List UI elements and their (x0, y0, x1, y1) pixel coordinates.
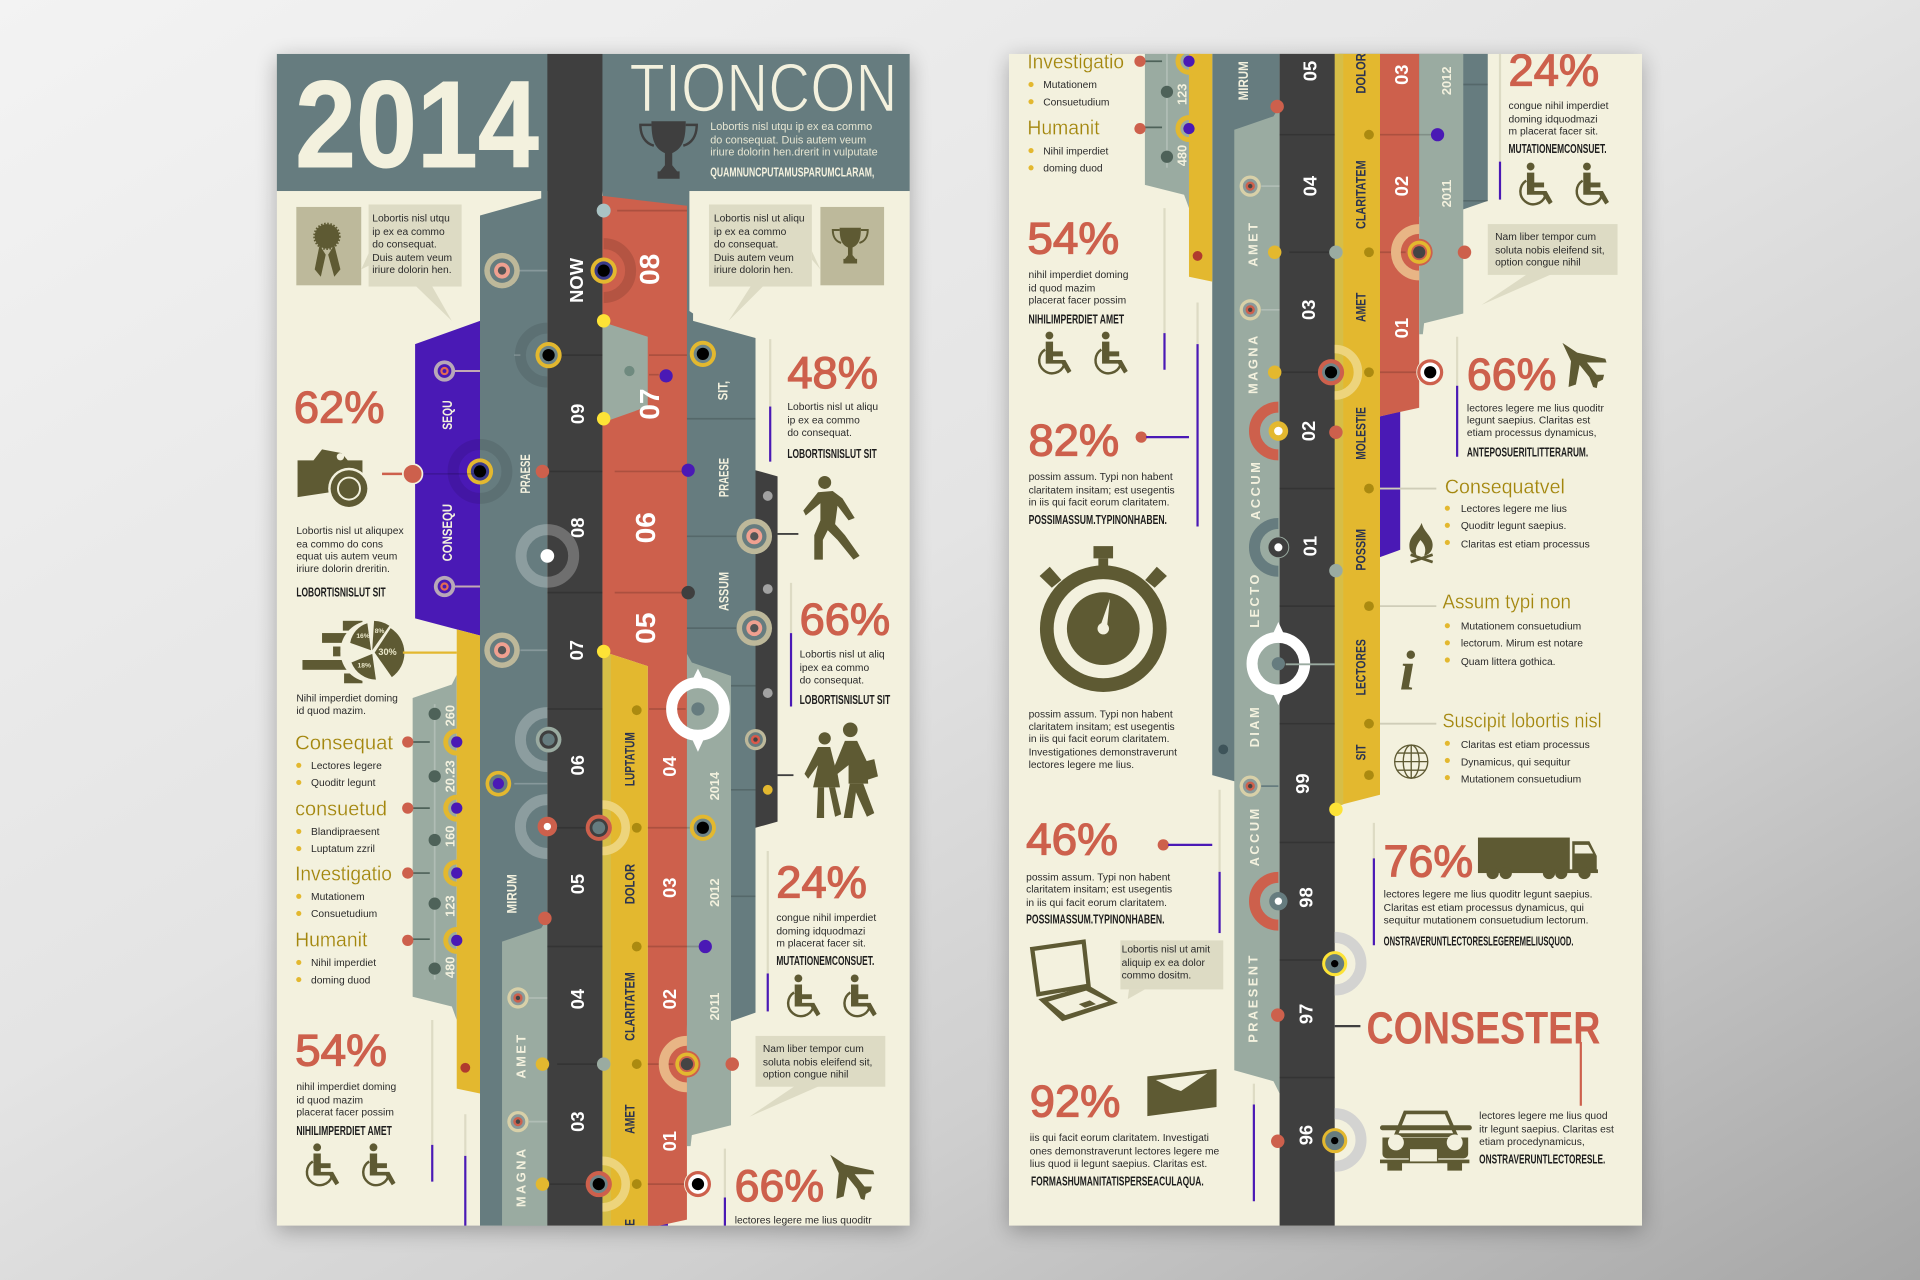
stat 62% with camera (294, 383, 480, 599)
stat 48%: 48% (787, 349, 878, 398)
stat 92% with envelope: iis qui facit eorum claritatem. Investigati (1030, 1133, 1209, 1144)
timeline markers upper (434, 204, 773, 1207)
strip labels: 01 (659, 1131, 680, 1151)
stat 54% repeated: placerat facer possim (1029, 296, 1126, 307)
stat 76% with truck: ONSTRAVERUNTLECTORESLEGEREMELIUSQUOD. (1384, 933, 1573, 948)
list: Suscipit lobortis nisl with globe: Dynamicus, qui sequitur (1461, 757, 1571, 768)
callout: ribbon (296, 204, 462, 321)
strip labels: AMET (513, 1032, 528, 1079)
lists: left column: Blandipraesent (311, 827, 380, 838)
stat 24% with wheelchairs (768, 851, 877, 1016)
strip labels: right page: 97 (1296, 1004, 1317, 1024)
panel: right page (1009, 45, 1642, 1226)
list: Assum typi non with info icon: Mutationem consuetudium (1461, 621, 1581, 632)
stat 92% with envelope: ones demonstraverunt lectores legere me (1030, 1147, 1220, 1158)
strip labels: 260 (442, 705, 457, 726)
strip labels: 2014 (707, 771, 722, 800)
stat 62% with camera: 62% (294, 383, 384, 432)
strip labels: right page: 99 (1292, 773, 1313, 794)
stat 76% with truck: sequitur mutationem consuetudium lectorum. (1384, 915, 1589, 926)
callout: ribbon: do consequat. (372, 239, 437, 250)
lists: left column: Humanit (295, 930, 368, 952)
strip labels: right page: 2012 (1439, 67, 1454, 95)
stat 66% lower with plane: lectores legere me lius quoditr (735, 1215, 872, 1226)
strip labels: 06 (567, 755, 588, 776)
stat 48%: Lobortis nisl ut aliqu (787, 402, 878, 413)
stat 82%: in iis qui facit eorum claritatem. (1029, 498, 1169, 509)
icon: couple (778, 722, 878, 818)
list: Consequatvel with fire icon: Claritas est etiam processus (1461, 539, 1590, 550)
list: Assum typi non with info icon: i (1400, 640, 1416, 702)
icon: laptop with callout: commo dositm. (1122, 970, 1191, 981)
strip labels: PRAESE (717, 458, 732, 497)
icon: stopwatch (1040, 546, 1167, 692)
list: Consequatvel with fire icon: Consequatvel (1445, 476, 1565, 498)
stat 48%: ip ex ea commo (787, 416, 860, 427)
strip labels: 07 (566, 640, 587, 660)
stat 92% with envelope: lius quod ii legunt saepius. Claritas est. (1030, 1159, 1207, 1170)
callout: Nam liber: option congue nihil (763, 1070, 848, 1081)
strip labels: right page: 01 (1299, 536, 1320, 556)
stat 92% with envelope: FORMASHUMANITATISPERSEACULAQUA. (1031, 1173, 1204, 1188)
header text block: Lobortis nisl utqu ip ex ea commo (710, 121, 872, 133)
panel: left page (277, 49, 910, 1272)
list: Consequatvel with fire icon (1409, 476, 1590, 562)
strip labels: LUPTATUM (621, 732, 637, 786)
stat 76% with truck: Claritas est etiam processus dynamicus, qui (1384, 903, 1584, 914)
strip labels: MOLESTIE (621, 1219, 637, 1272)
chart: pie icon: 30% (378, 647, 397, 657)
strip labels: PRAESE (518, 454, 533, 493)
list: Suscipit lobortis nisl with globe: Claritas est etiam processus (1461, 740, 1590, 751)
stat 46%: claritatem insitam; est usegentis (1026, 885, 1172, 896)
list: Suscipit lobortis nisl with globe (1395, 710, 1602, 785)
stat 76% with truck: lectores legere me lius quoditr legunt saepius. (1384, 890, 1593, 901)
stat 54% with wheelchairs: placerat facer possim (296, 1108, 394, 1119)
stat 76% with truck (1374, 823, 1598, 948)
text block under stopwatch: claritatem insitam; est usegentis (1029, 722, 1175, 733)
callout: trophy: iriure dolorin hen. (714, 265, 793, 276)
header text block (710, 121, 878, 179)
strip labels: right page: DIAM (1247, 705, 1262, 747)
strip labels: right page: AMET (1246, 221, 1261, 267)
icon: laptop with callout: Lobortis nisl ut amit (1122, 945, 1210, 956)
stat 82%: POSSIMASSUM.TYPINONHABEN. (1029, 512, 1167, 527)
text block under stopwatch: lectores legere me lius. (1029, 760, 1134, 771)
text block: car (1479, 1111, 1614, 1166)
strip labels: 05 (630, 613, 661, 644)
stat 92% with envelope (1030, 1069, 1254, 1201)
tick lines continued (1167, 45, 1488, 1078)
lists: left column: Nihil imperdiet (311, 958, 376, 969)
strip labels: 480 (442, 957, 457, 978)
strip labels: right page: CLARITATEM (1352, 160, 1368, 229)
lists continued: doming duod (1043, 163, 1103, 174)
callout: trophy: ip ex ea commo (714, 227, 787, 238)
stat 54% repeated: id quod mazim (1029, 283, 1095, 294)
header text block: do consequat. Duis autem veum (710, 134, 866, 146)
lists continued: Investigatio (1027, 52, 1124, 74)
stat 54% with wheelchairs: id quod mazim (296, 1095, 363, 1106)
stat 66% upper: do consequat. (800, 675, 864, 686)
stat 82% (1029, 417, 1189, 527)
strip labels: SIT, (715, 381, 730, 400)
strip labels: CLARITATEM (621, 972, 637, 1041)
stat 66% with plane (1457, 337, 1607, 460)
strip labels: MAGNA (513, 1146, 528, 1207)
strip labels: 04 (567, 988, 588, 1009)
icon: header trophy (640, 121, 697, 179)
stat 24% with wheelchairs: 24% (776, 859, 867, 908)
stat 76% with truck: 76% (1384, 838, 1473, 887)
timeline tick lines (435, 211, 756, 1184)
stat 46%: POSSIMASSUM.TYPINONHABEN. (1026, 911, 1164, 926)
strip labels: right page: 98 (1296, 887, 1317, 908)
lists continued (1027, 50, 1200, 174)
strip labels: ASSUM (717, 572, 732, 611)
stat 62% with camera: equat uis autem veum (296, 552, 397, 563)
strip labels: right page: MOLESTIE (1352, 407, 1368, 460)
lists: left column: Lectores legere (311, 761, 382, 772)
year 2014: 2014 (295, 56, 539, 194)
stat 46%: in iis qui facit eorum claritatem. (1026, 898, 1167, 909)
stat 54% with wheelchairs: NIHILIMPERDIET AMET (296, 1123, 392, 1138)
header text block: QUAMNUNCPUTAMUSPARUMCLARAM, (710, 164, 874, 179)
text block: car: ONSTRAVERUNTLECTORESLE. (1479, 1151, 1605, 1166)
stat 54% with wheelchairs: 54% (295, 1026, 387, 1075)
chart: pie icon: Nihil imperdiet doming (296, 694, 398, 705)
strip labels: right page: 02 (1298, 421, 1319, 441)
text block under stopwatch (1029, 710, 1177, 771)
chart: pie icon: 18% (358, 662, 371, 669)
strip labels: 05 (567, 874, 588, 894)
stat 46%: 46% (1026, 816, 1118, 865)
callout: ribbon: iriure dolorin hen. (372, 265, 452, 276)
lists continued: Nihil imperdiet (1043, 146, 1108, 157)
strip labels: 2012 (707, 878, 722, 907)
strip labels: right page: AMET (1352, 292, 1368, 322)
callout: ribbon: Lobortis nisl utqu (372, 214, 450, 225)
callout: trophy: do consequat. (714, 239, 778, 250)
stat 24% with wheelchairs: MUTATIONEMCONSUET. (776, 953, 874, 968)
callout: Nam liber: Nam liber tempor cum (763, 1044, 864, 1055)
stat 24% repeated: m placerat facer sit. (1509, 127, 1598, 138)
stat 82%: claritatem insitam; est usegentis (1029, 485, 1175, 496)
text block: car: etiam procedynamicus, (1479, 1137, 1585, 1148)
strip labels: right page: LECTORES (1352, 639, 1368, 696)
continued content from left page (1027, 45, 1618, 1226)
stat 66% lower with plane (725, 1149, 874, 1226)
strip labels: right page: 96 (1296, 1125, 1317, 1145)
strip labels: 07 (634, 388, 665, 420)
callout: Nam liber: soluta nobis eleifend sit, (763, 1057, 872, 1068)
stat 66% upper: LOBORTISNISLUT SIT (800, 692, 890, 707)
strip labels: 02 (659, 989, 680, 1009)
stat 82%: 82% (1029, 417, 1119, 466)
list: Consequatvel with fire icon: Lectores legere me lius (1461, 504, 1567, 515)
stat 54% with wheelchairs: nihil imperdiet doming (296, 1082, 396, 1093)
stat 54% repeated: 54% (1027, 214, 1119, 263)
callout: trophy (709, 204, 884, 321)
chart: pie icon: id quod mazim. (296, 706, 366, 717)
strip labels: right page: ACCUM (1248, 460, 1263, 520)
list: Assum typi non with info icon: lectorum. Mirum est notare (1461, 639, 1583, 650)
markers: lower timeline (1218, 407, 1436, 1166)
callout: Nam liber (749, 1036, 885, 1117)
lists: left column (295, 708, 468, 986)
stat 24% with wheelchairs: congue nihil imperdiet (776, 913, 876, 924)
stat 24% repeated (1500, 45, 1609, 204)
chart: pie icon: 8% (375, 628, 384, 635)
strip labels: CONSEQU (440, 504, 455, 561)
stat 66% with plane: 66% (1467, 350, 1556, 399)
strip labels (440, 254, 732, 1272)
header band (277, 54, 910, 191)
stat 66% upper (791, 583, 890, 707)
lists: left column: Quoditr legunt (311, 778, 376, 789)
strip labels: 160 (442, 826, 457, 847)
lists: left column: consuetud (295, 799, 387, 821)
strip labels: 08 (567, 518, 588, 538)
lists: left column: Mutationem (311, 892, 365, 903)
stat 24% repeated: MUTATIONEMCONSUET. (1509, 141, 1607, 156)
strip labels: 06 (630, 512, 661, 543)
strip labels: right page (1175, 53, 1454, 1145)
strip labels: right page: 04 (1299, 175, 1320, 196)
lists continued: Humanit (1027, 118, 1100, 140)
stat 66% with plane: etiam processus dynamicus, (1467, 428, 1596, 439)
list: Assum typi non with info icon (1400, 592, 1583, 702)
list: Assum typi non with info icon: Quam littera gothica. (1461, 657, 1556, 668)
strip labels: NOW (566, 257, 587, 303)
stat 54% with wheelchairs (295, 1020, 465, 1226)
strip labels: right page: MIRUM (1236, 61, 1251, 100)
lists continued: Consuetudium (1043, 97, 1109, 108)
icon: laptop with callout (1032, 940, 1223, 1021)
stat 54% repeated (1027, 208, 1198, 527)
stat 54% repeated: NIHILIMPERDIET AMET (1029, 311, 1124, 326)
stat 66% with plane: ANTEPOSUERITLITTERARUM. (1467, 445, 1588, 460)
strip labels: 123 (442, 895, 457, 917)
lists: left column: Consuetudium (311, 909, 377, 920)
strip labels: 08 (634, 254, 665, 285)
markers continued (1193, 100, 1471, 396)
stat 46% (1026, 790, 1220, 933)
strip labels: 03 (659, 878, 680, 898)
text block under stopwatch: Investigationes demonstraverunt (1029, 748, 1177, 759)
strip labels: 03 (567, 1111, 588, 1132)
callout: ribbon: ip ex ea commo (372, 227, 445, 238)
text block: car: itr legunt saepius. Claritas est (1479, 1125, 1614, 1136)
timeline strips continued (1145, 45, 1488, 1226)
strip labels: right page: SIT (1352, 744, 1368, 760)
stat 66% with plane: legunt saepius. Claritas est (1467, 416, 1590, 427)
stat 24% repeated: doming idquodmazi (1509, 114, 1598, 125)
stat 62% with camera: LOBORTISNISLUT SIT (296, 584, 386, 599)
list: Consequatvel with fire icon: Quoditr legunt saepius. (1461, 521, 1566, 532)
lists continued: Mutationem (1043, 80, 1097, 91)
strip labels: 04 (659, 756, 680, 777)
strip labels: right page: 123 (1175, 84, 1190, 105)
strip labels: 2011 (707, 993, 722, 1020)
strip labels: right page: MAGNA (1246, 333, 1261, 394)
stat 48%: LOBORTISNISLUT SIT (787, 446, 877, 461)
stat 66% upper: 66% (800, 595, 890, 644)
strip labels: right page: ACCUM (1247, 806, 1262, 866)
text block under stopwatch: in iis qui facit eorum claritatem. (1029, 734, 1169, 745)
title TIONCON: TIONCON (629, 49, 898, 126)
callout: Nam liber repeated: Nam liber tempor cum (1495, 232, 1596, 243)
strip labels: right page: DOLOR (1352, 53, 1368, 94)
stat 54% repeated: nihil imperdiet doming (1029, 270, 1129, 281)
strip labels: right page: 02 (1391, 176, 1412, 196)
timeline strips (413, 54, 778, 1228)
lists: left column: doming duod (311, 975, 371, 986)
stat 66% upper: ipex ea commo (800, 663, 869, 674)
lists: left column: Consequat (295, 732, 393, 754)
strip labels: right page: 01 (1391, 318, 1412, 338)
strip labels: right page: 2011 (1439, 180, 1454, 207)
strip labels: right page: 03 (1298, 300, 1319, 320)
strip labels: MIRUM (505, 874, 520, 913)
stat 24% repeated: 24% (1509, 47, 1599, 96)
callout: Nam liber repeated: option congue nihil (1495, 258, 1581, 269)
stat 46%: possim assum. Typi non habent (1026, 872, 1170, 883)
strip labels: right page: 480 (1175, 145, 1190, 166)
list: Suscipit lobortis nisl with globe: Suscipit lobortis nisl (1442, 710, 1602, 732)
callout: trophy: Duis autem veum (714, 253, 794, 264)
icon: walking person (778, 476, 860, 560)
callout: Nam liber repeated (1482, 224, 1618, 305)
icon: car (1380, 1112, 1472, 1171)
stat 62% with camera: ea commo do cons (296, 539, 383, 550)
stat 48% (770, 339, 878, 462)
chart: pie icon (296, 621, 457, 717)
icon: laptop with callout: aliquip ex ea dolor (1122, 958, 1206, 969)
stat 66% lower with plane: 66% (735, 1162, 824, 1211)
lists: left column: Luptatum zzril (311, 844, 375, 855)
header text block: iriure dolorin hen.drerit in vulputate (710, 147, 878, 159)
stat 92% with envelope: 92% (1030, 1078, 1120, 1127)
strip labels: DOLOR (621, 864, 637, 904)
heading CONSESTER: CONSESTER (1367, 1002, 1600, 1053)
callout: ribbon: Duis autem veum (372, 253, 452, 264)
strip labels: SEQU (440, 400, 455, 430)
strip labels: right page: POSSIM (1352, 529, 1368, 571)
stat 66% with plane: lectores legere me lius quoditr (1467, 403, 1604, 414)
stat 24% with wheelchairs: m placerat facer sit. (776, 939, 866, 950)
callout: Nam liber repeated: soluta nobis eleifend sit, (1495, 245, 1605, 256)
lists: left column: Investigatio (295, 863, 392, 885)
stat 62% with camera: Lobortis nisl ut aliqupex (296, 526, 404, 537)
stat 24% with wheelchairs: doming idquodmazi (776, 926, 865, 937)
stat 82%: possim assum. Typi non habent (1029, 472, 1173, 483)
list: Assum typi non with info icon: Assum typi non (1442, 592, 1571, 614)
strip labels: 09 (567, 404, 588, 424)
strip labels: 20.23 (442, 760, 457, 792)
callout: trophy: Lobortis nisl ut aliqu (714, 214, 805, 225)
strip labels: right page: 03 (1391, 64, 1412, 85)
panel shadows (277, 59, 1642, 1231)
stat 48%: do consequat. (787, 428, 852, 439)
text block under stopwatch: possim assum. Typi non habent (1029, 710, 1173, 721)
stat 62% with camera: iriure dolorin dreritin. (296, 564, 390, 575)
strip labels: right page: PRAESENT (1246, 953, 1261, 1043)
text block: car: lectores legere me lius quod (1479, 1111, 1608, 1122)
chart: pie icon: 16% (356, 633, 370, 640)
stat 24% repeated: congue nihil imperdiet (1509, 101, 1609, 112)
stat 66% upper: Lobortis nisl ut aliq (800, 650, 885, 661)
strip labels: AMET (621, 1104, 637, 1134)
strip labels: right page: 05 (1299, 61, 1320, 81)
list: Suscipit lobortis nisl with globe: Mutationem consuetudium (1461, 774, 1581, 785)
strip labels: right page: LECTO (1247, 572, 1262, 628)
